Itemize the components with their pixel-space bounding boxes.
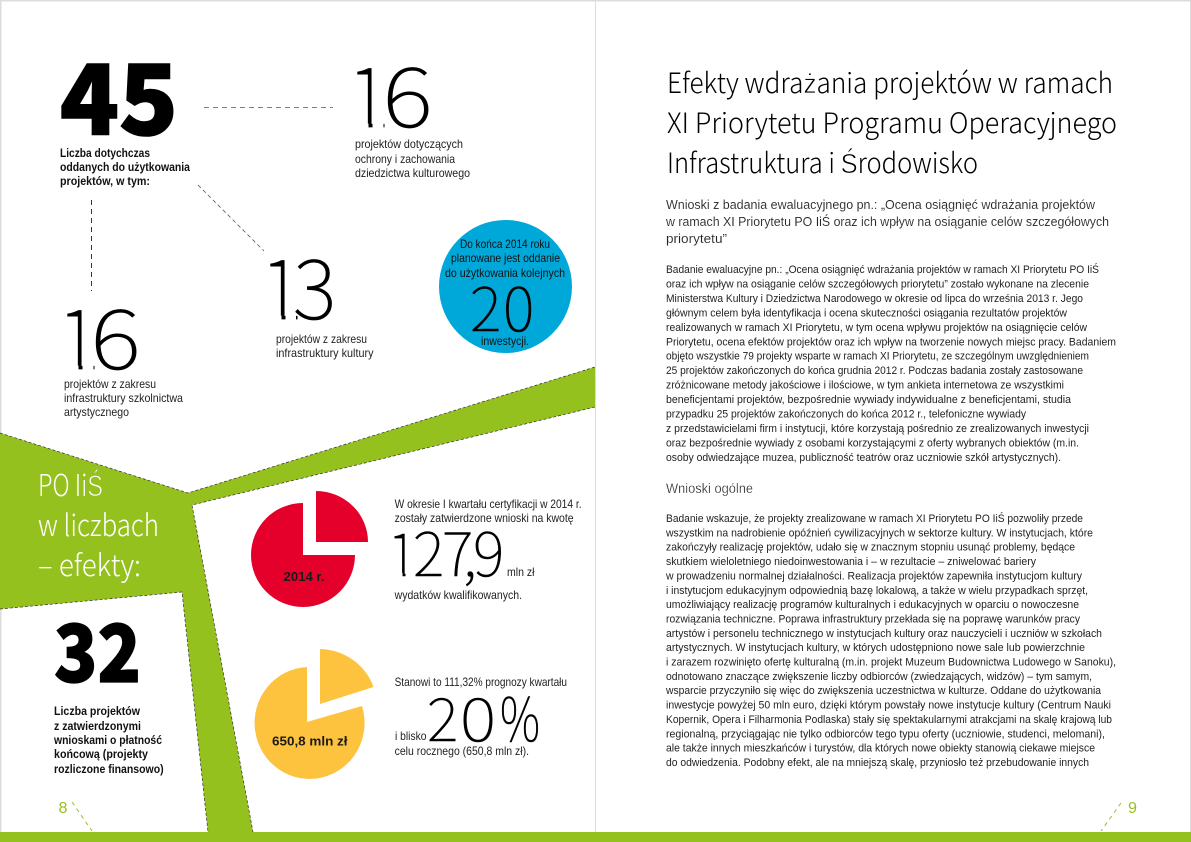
subheading: Wnioski ogólne: Wnioski ogólne <box>666 481 753 496</box>
caption for 45: projektów, w tym: <box>60 176 150 188</box>
stat: 13 culture infrastructure projects: projektów z zakresu <box>276 333 367 346</box>
panel: total of 45 projects <box>60 22 191 188</box>
panel: 32 settled projects <box>53 590 164 776</box>
body text: general conclusions: skutkiem wieloletniego niedoinwestowania i – w rezultacie – zniwelować bariery <box>666 556 1037 568</box>
page number 8: 8 <box>58 800 68 817</box>
stat: 127,9 mln zł: 27,9 <box>413 507 504 594</box>
stat: 127,9 mln zł: zostały zatwierdzone wnioski na kwotę <box>395 512 574 525</box>
callout: blue circle, 20 investments: Do końca 2014 roku <box>460 238 550 251</box>
pie chart: red, 2014 <box>251 491 368 607</box>
callout: blue circle, 20 investments: planowane jest oddanie <box>451 252 560 265</box>
page number 9: 9 <box>1128 800 1137 817</box>
body text: general conclusions: artystów i personelu technicznego w instytucjach kultury oraz nauczycieli i uczniów w szkołach <box>666 628 1102 640</box>
caption for 32 <box>53 706 164 776</box>
stat: 20% of annual target: 0 <box>460 672 496 759</box>
body text: study description: z przedstawicielami firm i instytucji, które korzystają pośrednio ze zrealizowanych inwestycji <box>666 423 1089 435</box>
body text: general conclusions: umożliwiający realizację programów kulturalnych i edukacyjnych w oparciu o nowoczesne <box>666 599 1079 611</box>
stat: 16 arts education projects: 1 <box>56 273 100 393</box>
body text: study description: Ministerstwa Kultury i Dziedzictwa Narodowego w okresie od lipca do września 2013 r. Jego <box>666 293 1083 305</box>
callout: blue circle, 20 investments: 20 <box>470 262 534 349</box>
green bottom bar <box>0 832 1191 842</box>
stat: 16 arts education projects: infrastruktury szkolnictwa <box>64 392 183 405</box>
body text: study description: realizowanych w ramach XI Priorytetu, w tym ocena wpływu projektów na osiągnięcie celów <box>666 322 1087 334</box>
title: Infrastruktura i Środowisko <box>667 142 978 182</box>
caption for 45 <box>60 148 191 188</box>
body text: study description: beneficjentami projektów, bezpośrednie wywiady indywidualne z beneficjentami, studia <box>666 394 1071 406</box>
page number 9 <box>1101 800 1137 831</box>
body text: study description: Badanie ewaluacyjne pn.: „Ocena osiągnięć wdrażania projektów w ramach XI Priorytetu PO IiŚ <box>666 263 1099 276</box>
body text: general conclusions: zakończyły realizację projektów, udało się w znacznym stopniu usunąć problemy, będące <box>666 542 1075 554</box>
heading: PO IiŚ w liczbach: w liczbach <box>38 501 159 545</box>
dashed connector to culture infrastructure projects <box>198 185 264 251</box>
body text: general conclusions: w prowadzeniu normalnej działalności. Realizacja projektów zapewniła instytucjom kultury <box>665 570 1083 582</box>
stat: 16 heritage projects: dziedzictwa kulturowego <box>355 167 470 180</box>
stat: 127,9 mln zł: mln zł <box>507 566 535 579</box>
stat: 20% of annual target: i blisko <box>395 730 426 743</box>
body text: general conclusions: odnotowano znaczące zwiększenie liczby odbiorców (zwiedzających, widzów) – tym samym, <box>666 671 1092 683</box>
dashed connector to heritage projects <box>204 106 333 108</box>
body text: general conclusions: wsparcie przyczyniło się więc do zwiększenia uczestnictwa w kulturze. Oddane do użytkowania <box>665 685 1101 697</box>
caption for 32: końcową (projekty <box>54 749 149 761</box>
stat: 16 heritage projects <box>346 31 470 180</box>
body text: general conclusions: inwestycje powyżej 50 mln euro, dzięki którym powstały nowe instytucje kultury (Centrum Nauki <box>666 700 1111 712</box>
stat: 20% of annual target: % <box>500 672 540 759</box>
stat: 20% of annual target: 2 <box>427 672 458 759</box>
pie chart: yellow, 650,8 mln zł: 650,8 mln zł <box>272 734 348 748</box>
green shape: dividing band and title panel <box>0 367 595 832</box>
stat: 13 culture infrastructure projects: 1 <box>260 223 303 343</box>
heading: PO IiŚ w liczbach: – efekty: <box>38 541 141 585</box>
body text: study description: oraz ich wpływ na osiąganie celów szczegółowych priorytetu” zostało wykonane na zlecenie <box>666 278 1089 290</box>
big number 32: 32 <box>54 590 141 706</box>
intro text block: Wnioski z badania ewaluacyjnego pn.: „Ocena osiągnięć wdrażania projektów <box>666 198 1096 212</box>
stat: 16 heritage projects: projektów dotyczących <box>355 138 463 151</box>
caption for 32: Liczba projektów <box>54 706 140 718</box>
body text: general conclusions: wszystkim na nadrobienie opóźnień cywilizacyjnych w sektorze kultury. W instytucjach, które <box>665 527 1093 539</box>
stat: 20% of annual target <box>395 672 567 759</box>
title <box>667 62 1117 182</box>
caption for 32: rozliczone finansowo) <box>54 764 164 776</box>
stat: 13 culture infrastructure projects: infrastruktury kultury <box>276 347 374 360</box>
stat: 16 heritage projects: ochrony i zachowania <box>355 153 455 166</box>
body text: study description: Priorytetu, ocena efektów projektów oraz ich wpływ na tworzenie nowych miejsc pracy. Badaniem <box>666 336 1116 348</box>
body text: general conclusions: rozwiązania techniczne. Poprawa infrastruktury przekłada się na poprawę warunków pracy <box>666 614 1081 626</box>
body text: general conclusions: regionalną, przyciągając nie tylko odbiorców tego typu oferty (uczniowie, studenci, melomani), <box>666 728 1105 740</box>
stat: 16 arts education projects: 6 <box>91 273 141 393</box>
callout: blue circle, 20 investments <box>439 220 572 353</box>
caption for 32: wnioskami o płatność <box>53 735 163 747</box>
stat: 20% of annual target: celu rocznego (650,8 mln zł). <box>395 745 529 758</box>
heading: PO IiŚ w liczbach: PO IiŚ <box>38 461 103 505</box>
stat: 20% of annual target: Stanowi to 111,32% prognozy kwartału <box>395 676 567 689</box>
caption for 32: z zatwierdzonymi <box>54 721 141 733</box>
intro text block: w ramach XI Priorytetu PO IiŚ oraz ich wpływ na osiąganie celów szczegółowych <box>665 214 1109 229</box>
intro text block: priorytetu” <box>666 232 727 246</box>
intro text block <box>665 198 1109 246</box>
stat: 16 arts education projects <box>56 273 183 419</box>
caption for 45: oddanych do użytkowania <box>60 162 191 174</box>
big number 45: 45 <box>60 22 178 162</box>
caption for 45: Liczba dotychczas <box>60 148 150 160</box>
stat: 16 arts education projects: projektów z zakresu <box>64 378 156 391</box>
pie chart: red, 2014: 2014 r. <box>284 569 324 584</box>
title: Efekty wdrażania projektów w ramach <box>667 62 1113 102</box>
body text: general conclusions: i zarazem rozwinięto ofertę kulturalną (m.in. projekt Muzeum Budownictwa Ludowego w Sanoku), <box>666 656 1116 668</box>
stat: 16 arts education projects: artystycznego <box>64 406 129 419</box>
stat: 127,9 mln zł: 1 <box>387 507 418 594</box>
title: XI Priorytetu Programu Operacyjnego <box>667 102 1117 142</box>
callout: blue circle, 20 investments: do użytkowania kolejnych <box>445 267 565 280</box>
stat: 16 heritage projects: 1 <box>346 31 390 151</box>
body text: study description: głównym celem była identyfikacja i ocena skuteczności osiągania rezultatów projektów <box>666 307 1067 319</box>
body text: general conclusions <box>665 512 1116 769</box>
stat: 13 culture infrastructure projects: 3 <box>293 223 336 343</box>
stat: 127,9 mln zł: W okresie I kwartału certyfikacji w 2014 r. <box>395 498 582 511</box>
heading: PO IiŚ w liczbach <box>38 461 159 585</box>
body text: study description: zróżnicowane metody jakościowe i ilościowe, w tym ankieta internetowa ze wszystkimi <box>666 380 1064 392</box>
stat: 16 heritage projects: 6 <box>383 31 433 151</box>
body text: general conclusions: Kopernik, Opera i Filharmonia Podlaska) stały się spektakularnymi atrakcjami na skalę krajową lub <box>666 714 1112 726</box>
stat: 127,9 mln zł: wydatków kwalifikowanych. <box>394 589 522 602</box>
body text: general conclusions: i instytucjom edukacyjnym odpowiednią bazę lokalową, a także w wielu przypadkach sprzęt, <box>666 585 1088 597</box>
body text: study description <box>666 263 1116 464</box>
body text: study description: przypadku 25 projektów zakończonych do końca 2012 r., telefoniczne wywiady <box>666 408 1027 420</box>
body text: general conclusions: ale także innych mieszkańców i turystów, dla których nowe obiekty stanowią ciekawe miejsce <box>666 743 1095 755</box>
stat: 127,9 mln zł <box>387 498 582 602</box>
body text: study description: objęto wszystkie 79 projekty wsparte w ramach XI Priorytetu, ze szczególnym uwzględnieniem <box>666 351 1089 363</box>
body text: general conclusions: artystycznych. W instytucjach kultury, w których udostępniono nowe sale lub powierzchnie <box>666 642 1085 654</box>
page number 8 <box>58 800 92 831</box>
body text: study description: 25 projektów zakończonych do końca grudnia 2012 r. Podczas badania zostały zastosowane <box>666 365 1083 377</box>
body text: general conclusions: do odwiedzenia. Podobny efekt, ale na mniejszą skalę, przyniosło też przebudowanie innych <box>666 757 1089 769</box>
body text: study description: oraz bezpośrednie wywiady z osobami korzystającymi z oferty wybranych obiektów (m.in. <box>666 437 1079 449</box>
dashed connector to arts education projects <box>90 200 92 291</box>
pie chart: yellow, 650,8 mln zł <box>255 649 374 779</box>
body text: general conclusions: Badanie wskazuje, że projekty zrealizowane w ramach XI Priorytetu PO IiŚ pozwoliły przede <box>666 512 1083 525</box>
callout: blue circle, 20 investments: inwestycji. <box>481 335 529 348</box>
body text: study description: osoby odwiedzające muzea, publiczność teatrów oraz uczniowie szkół artystycznych). <box>666 452 1061 464</box>
stat: 13 culture infrastructure projects <box>260 223 374 360</box>
